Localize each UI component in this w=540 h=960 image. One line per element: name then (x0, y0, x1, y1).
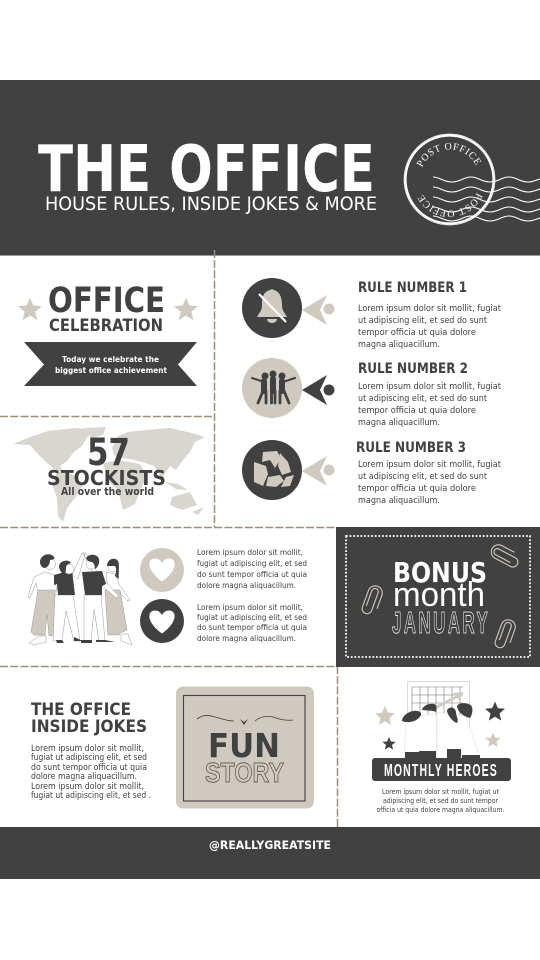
body text: do sunt tempor officia ut quia (31, 763, 147, 773)
rule 2 (242, 358, 501, 428)
footer (0, 827, 540, 879)
text block 2 (197, 602, 307, 643)
heading (31, 700, 147, 737)
fun: FUN (208, 726, 280, 765)
body text: dolore magna aliquacillum. (31, 772, 137, 782)
label: all over the world: All over the world (61, 486, 154, 498)
illustration: chart and team (402, 682, 480, 758)
caption (376, 787, 504, 814)
icon: post office stamp: POST OFFICE (418, 192, 483, 218)
ribbon banner (24, 342, 197, 386)
caption: adipiscing elit, et sed do sunt tempor (383, 796, 498, 805)
icon: recycle (242, 440, 302, 500)
rule 1 heading: RULE NUMBER 1 (358, 280, 467, 296)
ribbon banner: Today we celebrate the (62, 355, 159, 364)
icon: star dark large (485, 702, 505, 720)
rule 1 text: ut adipiscing elit, et sed do sunt (358, 315, 487, 326)
caption: Lorem ipsum dolor sit mollit, fugiat ut (382, 787, 499, 796)
rule 3 text: Lorem ipsum dolor sit mollit, fugiat (358, 459, 501, 470)
text block 1: fugiat ut adipiscing elit, et sed (197, 558, 307, 568)
arrow 2 (302, 375, 334, 405)
world map (13, 427, 205, 522)
icon: group of people (242, 358, 302, 418)
rule 2 text: tempor officia ut quia dolore (358, 405, 476, 416)
rule 3 text: magna aliquacillum. (358, 495, 440, 506)
rule 1 text: magna aliquacillum. (358, 339, 440, 350)
card: fun story (176, 686, 314, 808)
body text: Lorem ipsum dolor sit mollit, (31, 782, 144, 792)
label: stockists: STOCKISTS (47, 466, 166, 490)
rule 3 (242, 440, 501, 506)
rule 3 heading: RULE NUMBER 3 (356, 440, 466, 456)
panel: monthly heroes (372, 682, 511, 814)
icon: right star (174, 298, 198, 320)
rule 3 text (358, 459, 501, 506)
rule 2 text: ut adipiscing elit, et sed do sunt (358, 393, 487, 404)
text block 2: fugiat ut adipiscing elit, et sed (197, 612, 307, 622)
icon: left star (18, 298, 42, 320)
icon: paperclip top (489, 542, 522, 569)
icon: post office stamp: POST OFFICE (416, 142, 482, 168)
banner: monthly heroes: MONTHLY HEROES (384, 761, 497, 781)
rule 3 text: tempor officia ut quia dolore (358, 483, 476, 494)
body text (31, 744, 151, 801)
heading: THE OFFICE (31, 700, 131, 720)
icon: star beige small (485, 732, 501, 747)
icon: star beige large (375, 706, 395, 725)
subtitle: HOUSE RULES, INSIDE JOKES & MORE (45, 193, 377, 215)
stat: 57: 57 (87, 431, 130, 474)
heading: office: OFFICE (48, 281, 165, 321)
panel: rules (242, 278, 501, 506)
body text: fugiat ut adipiscing elit, et sed (31, 753, 147, 763)
heading: INSIDE JOKES (31, 717, 147, 737)
body text: fugiat ut adipiscing elit, et sed . (31, 791, 151, 801)
rule 2 text (358, 381, 501, 428)
icon: silenced bell (242, 278, 302, 338)
january: JANUARY (392, 607, 488, 640)
rule 1 text: tempor officia ut quia dolore (358, 327, 476, 338)
icon: dark heart (140, 599, 184, 643)
ribbon banner: biggest office achievement (55, 366, 167, 375)
heading: celebration: CELEBRATION (49, 316, 163, 335)
rule 2 text: Lorem ipsum dolor sit mollit, fugiat (358, 381, 501, 392)
body text: Lorem ipsum dolor sit mollit, (31, 744, 144, 754)
rule 1 (242, 278, 501, 350)
text block 1: do sunt tempor officia ut quia (197, 569, 307, 579)
caption: officia ut quia dolore magna aliquacillum. (376, 805, 504, 814)
bonus: BONUS (393, 557, 487, 589)
panel: office celebration (18, 281, 198, 386)
rule 2 heading: RULE NUMBER 2 (358, 361, 468, 377)
footer handle: @REALLYGREATSITE (209, 838, 331, 852)
flourish (197, 715, 293, 725)
panel: bonus month (336, 527, 540, 667)
title: THE OFFICE (38, 132, 375, 207)
story: STORY (205, 757, 284, 788)
rule 2 text: magna aliquacillum. (358, 417, 440, 428)
arrow 3 (302, 456, 334, 486)
icon: beige heart (140, 548, 184, 592)
text block 2: do sunt tempor officia ut quia (197, 622, 307, 632)
arrow 1 (302, 295, 334, 325)
icon: post office stamp (404, 134, 540, 226)
text block 1 (197, 547, 307, 590)
icon: star dark small (382, 737, 396, 750)
panel: stockists (13, 427, 205, 522)
rule 3 text: ut adipiscing elit, et sed do sunt (358, 471, 487, 482)
text block 2: Lorem ipsum dolor sit mollit, (197, 602, 303, 612)
text block 1: Lorem ipsum dolor sit mollit, (197, 547, 303, 557)
icon: paperclip left (361, 584, 384, 617)
text block 1: dolore magna aliquacillum. (197, 580, 296, 590)
rule 1 text (358, 303, 501, 350)
panel: inside jokes (31, 700, 151, 801)
month: month (393, 576, 485, 614)
panel: team high five (28, 547, 307, 645)
text block 2: dolore magna aliquacillum. (197, 633, 296, 643)
rule 1 text: Lorem ipsum dolor sit mollit, fugiat (358, 303, 501, 314)
icon: paperclip bottom (494, 618, 517, 651)
illustration: four people high-fiving (28, 553, 132, 645)
header banner (0, 80, 540, 256)
